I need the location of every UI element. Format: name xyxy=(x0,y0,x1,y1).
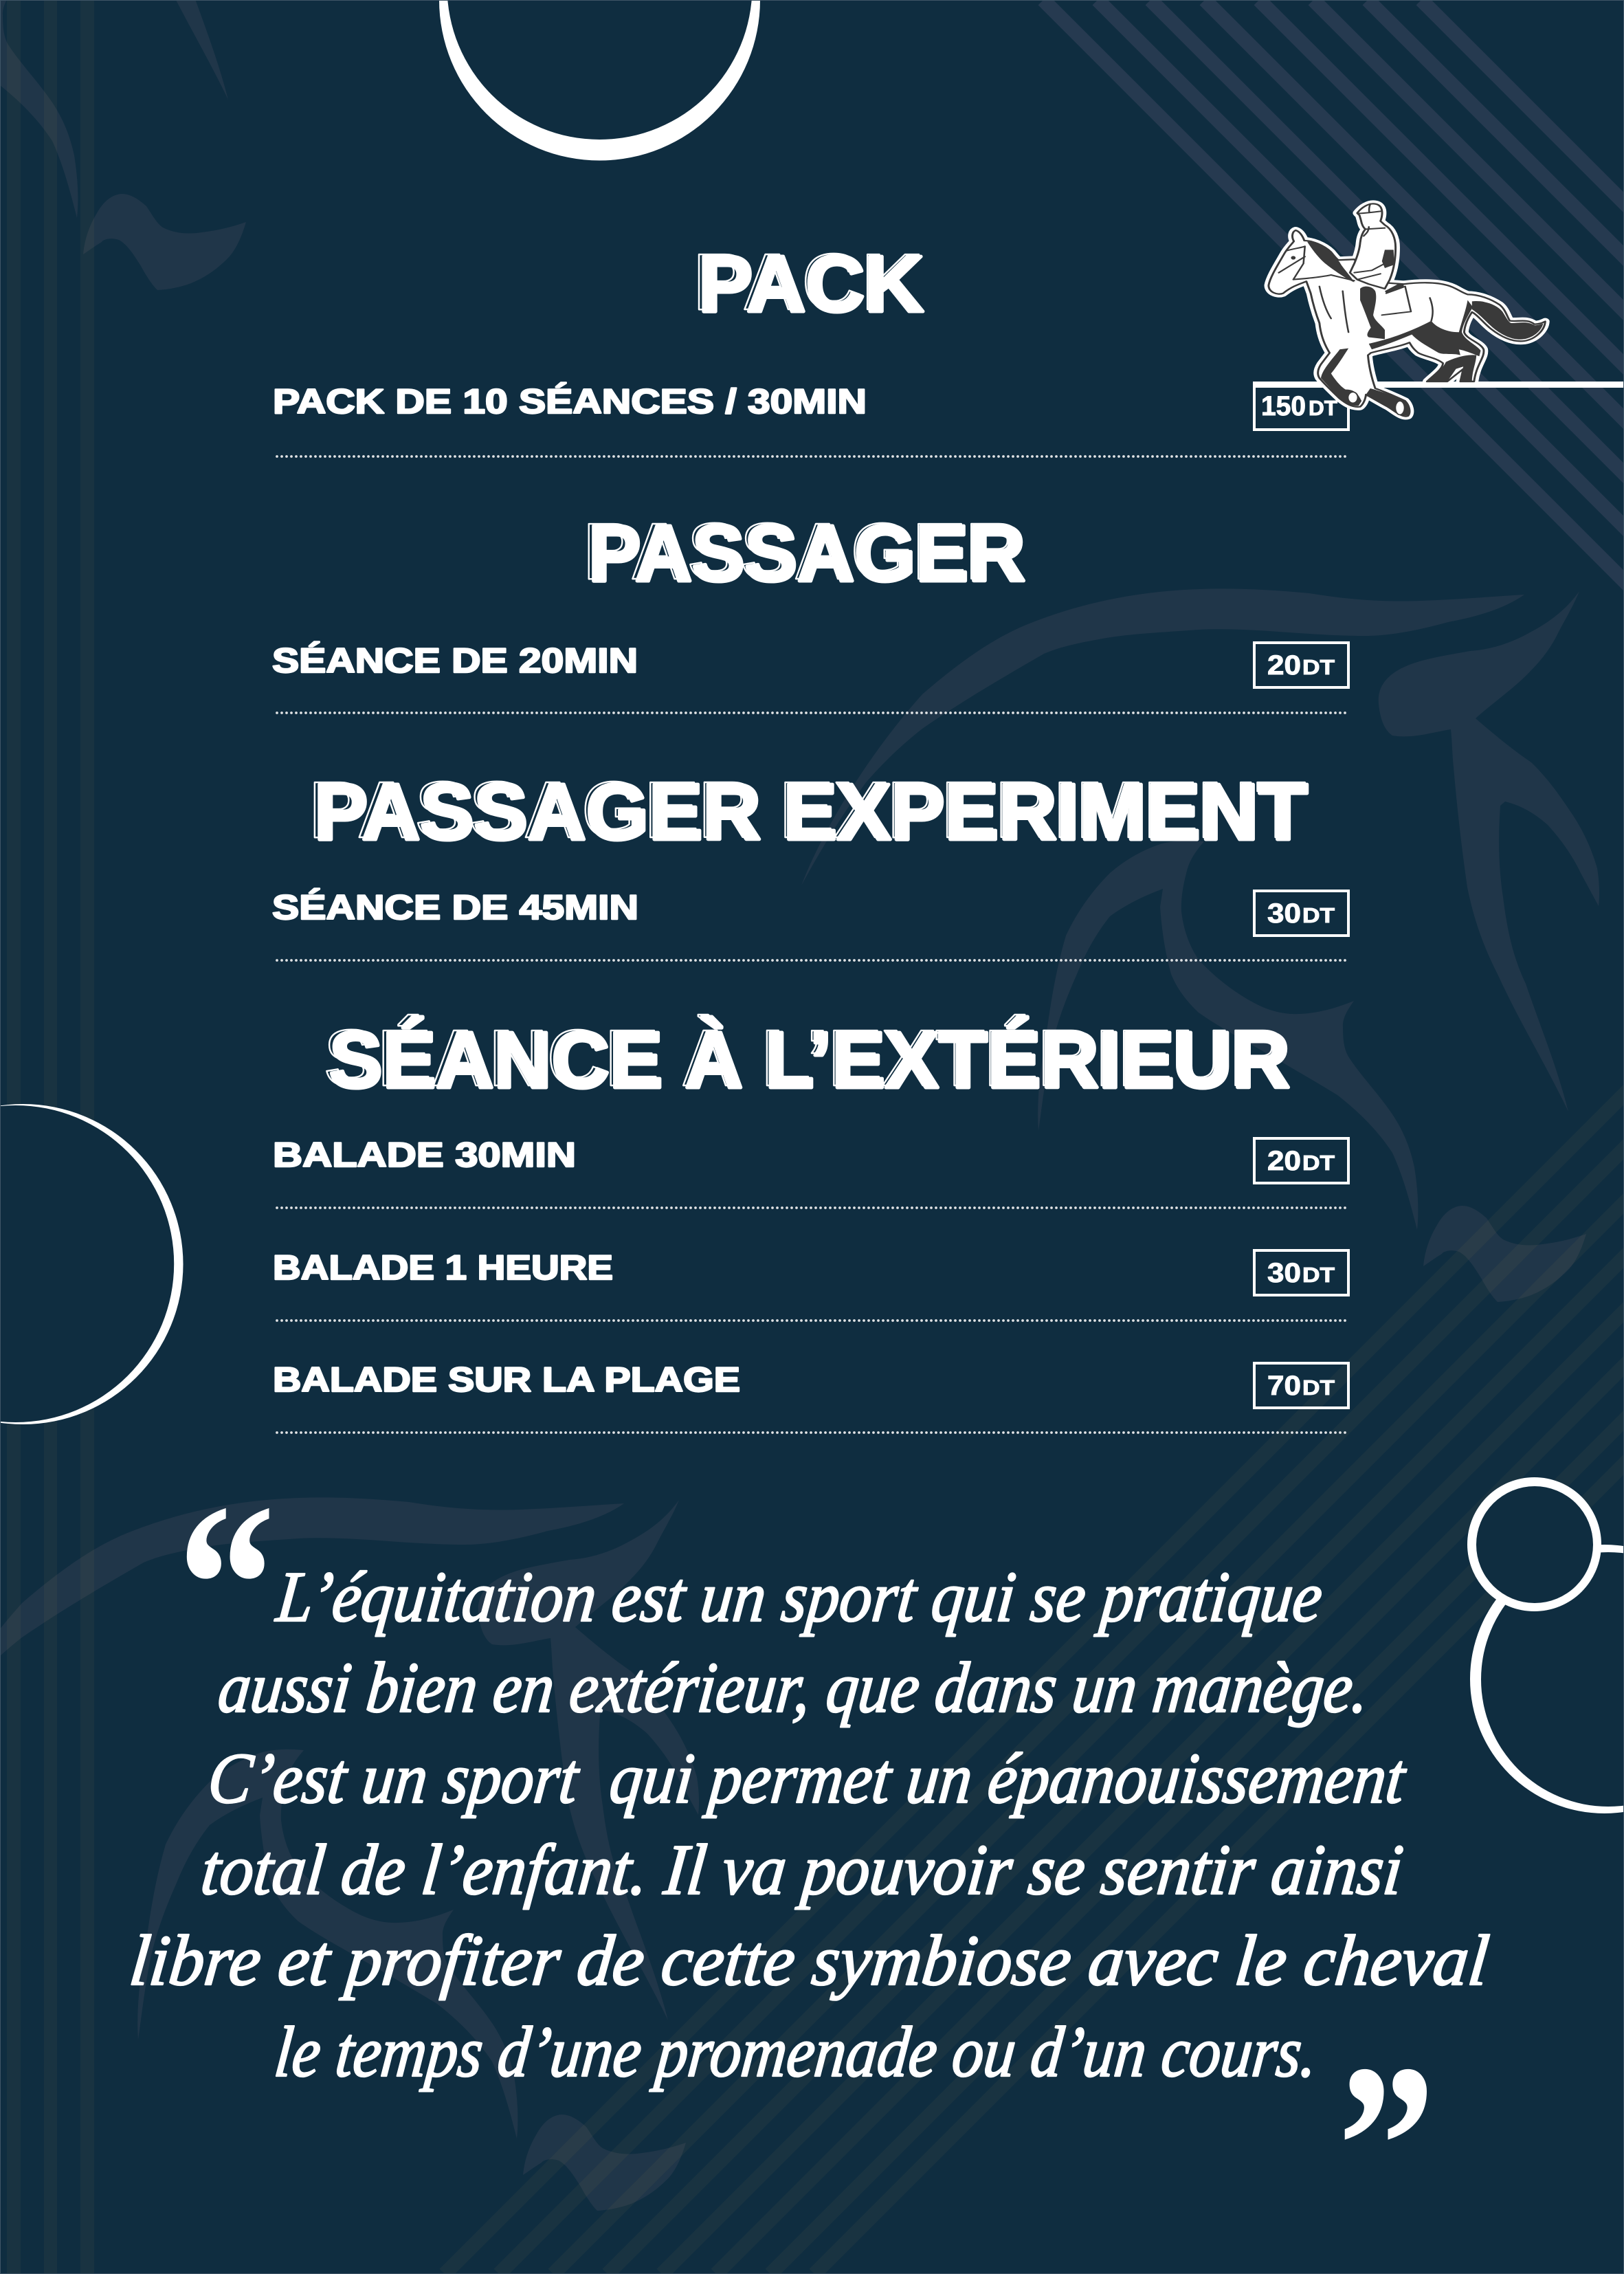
diagonal stripes bottom right xyxy=(445,1069,1624,2274)
price: 20DT xyxy=(1254,643,1348,687)
item: séance de 20min: SÉANCE DE 20MIN xyxy=(272,641,638,680)
dotted divider 1 xyxy=(277,455,1348,458)
circle: left crescent xyxy=(0,1104,183,1424)
sticker halo xyxy=(1269,203,1545,417)
watermark: antler motif centre right xyxy=(801,588,1599,1302)
watermark: antler motif top left xyxy=(0,0,259,290)
price: 150DT: DT xyxy=(1309,396,1337,420)
price: 20DT: DT xyxy=(1302,1151,1335,1175)
quote text: aussi bien en extérieur, que dans un manège. xyxy=(215,1648,1373,1727)
price: 30DT xyxy=(1254,891,1348,936)
item: balade sur la plage: BALADE SUR LA PLAGE xyxy=(273,1360,740,1399)
horse eye xyxy=(1291,256,1295,260)
horse body outline xyxy=(1269,230,1545,417)
quote text: libre et profiter de cette symbiose avec le cheval xyxy=(126,1921,1493,2000)
item: balade 30min: BALADE 30MIN xyxy=(273,1136,576,1174)
dark shading of horse: tail, belly, legs, mane xyxy=(1307,242,1543,415)
closing quote mark: ” xyxy=(1337,2016,1436,2274)
item: séance de 45min: SÉANCE DE 45MIN xyxy=(272,888,638,927)
quote text: le temps d’une promenade ou d’un cours. xyxy=(271,2012,1322,2092)
quote text xyxy=(126,1557,1493,2092)
item: pack de 10 séances: PACK DE 10 SÉANCES / 30MIN xyxy=(273,382,867,421)
icon: horse and rider xyxy=(1269,203,1545,417)
opening quote mark: “ xyxy=(177,1455,276,1714)
dotted divider 4 xyxy=(277,1206,1348,1209)
circles: right pair xyxy=(1467,1477,1624,1813)
harness and coat lines xyxy=(1279,246,1433,332)
price: 20DT: 20 xyxy=(1267,650,1301,681)
diagonal stripes top right xyxy=(1043,0,1624,619)
price: 20DT: DT xyxy=(1302,655,1335,679)
price: 70DT: DT xyxy=(1302,1376,1335,1400)
price: 30DT: DT xyxy=(1302,903,1335,927)
dotted divider 3 xyxy=(277,959,1348,962)
price: 20DT: 20 xyxy=(1267,1146,1301,1176)
dotted divider 2 xyxy=(277,711,1348,714)
price: 150DT: 150 xyxy=(1261,391,1306,421)
price: 30DT: 30 xyxy=(1267,1258,1301,1288)
heading: PACK: PACK xyxy=(693,237,922,327)
price: 30DT: DT xyxy=(1302,1263,1335,1287)
heading: PASSAGER: PASSAGER xyxy=(583,507,1023,596)
price: 70DT xyxy=(1254,1363,1348,1408)
heading: SÉANCE À L'EXTÉRIEUR: SÉANCE À L’EXTÉRIEUR xyxy=(324,1013,1288,1103)
heading: PASSAGER EXPERIMENT: PASSAGER EXPERIMENT xyxy=(314,767,1308,857)
heading: PACK: PACK xyxy=(698,239,924,329)
separator line with horse rest xyxy=(1253,382,1624,388)
price: 150DT xyxy=(1254,384,1348,430)
rider torso and head xyxy=(1350,203,1396,289)
price: 30DT: 30 xyxy=(1267,898,1301,929)
hooves xyxy=(1348,392,1405,415)
quote text: L’équitation est un sport qui se pratique xyxy=(272,1557,1326,1637)
item: balade 1 heure: BALADE 1 HEURE xyxy=(273,1248,613,1287)
rider details: helmet, arm, thigh xyxy=(1355,204,1385,280)
vertical stripes left xyxy=(7,0,94,2274)
circle: top crescent xyxy=(439,0,760,161)
price: 70DT: 70 xyxy=(1267,1371,1301,1401)
heading: PASSAGER EXPERIMENT: PASSAGER EXPERIMENT xyxy=(309,765,1306,854)
dotted divider 5 xyxy=(277,1319,1348,1322)
price: 20DT xyxy=(1254,1138,1348,1183)
quote text: total de l’enfant. Il va pouvoir se sentir ainsi xyxy=(198,1830,1407,1910)
rider elbow band and saddle and boot xyxy=(1360,250,1403,339)
dotted divider 6 xyxy=(277,1431,1348,1434)
quote text: C’est un sport qui permet un épanouissement xyxy=(205,1738,1410,1818)
watermark: antler motif bottom left xyxy=(0,1497,699,2211)
heading: SÉANCE À L'EXTÉRIEUR: SÉANCE À L’EXTÉRIEUR xyxy=(329,1015,1290,1105)
heading: PASSAGER: PASSAGER xyxy=(588,509,1025,598)
price: 30DT xyxy=(1254,1250,1348,1295)
